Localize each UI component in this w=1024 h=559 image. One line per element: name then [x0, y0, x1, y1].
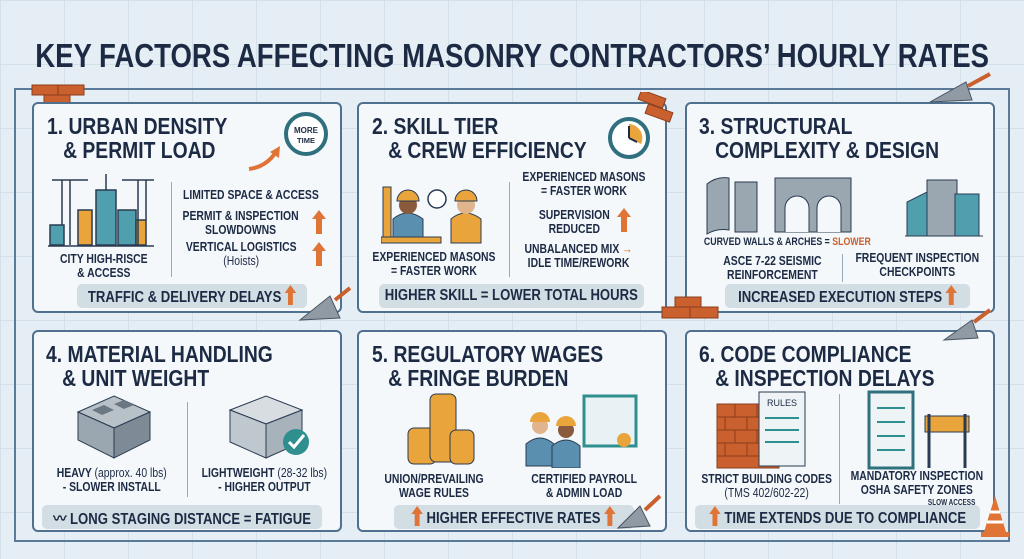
- panel: regulatory wages: & ADMIN LOAD: [546, 485, 622, 500]
- panel: urban density: [32, 102, 342, 313]
- text: EXPERIENCED MASONS: [372, 249, 496, 264]
- icon: heavy block: [76, 396, 152, 459]
- icon: curved walls and arch: [706, 177, 852, 235]
- icon: lightweight block: [228, 396, 309, 459]
- panel: material handling: [32, 330, 342, 532]
- icon: coins: [408, 394, 474, 464]
- callout bar: [379, 284, 644, 308]
- heading: & CREW EFFICIENCY: [388, 137, 587, 163]
- text: city high-rise: [60, 251, 148, 280]
- icon: workers and certificate: [526, 394, 638, 468]
- panel: skill tier: [357, 102, 667, 313]
- icon: traffic cone: [981, 496, 1009, 537]
- callout bar: INCREASED EXECUTION STEPS: [738, 289, 942, 306]
- heading: & UNIT WEIGHT: [62, 365, 209, 391]
- text: city high-rise: & ACCESS: [77, 265, 131, 280]
- icon: city high-rise: [48, 174, 154, 247]
- panel: regulatory wages: [357, 330, 667, 532]
- panel: material handling: - HIGHER OUTPUT: [218, 479, 310, 494]
- text: - SLOWER INSTALL: [62, 479, 161, 494]
- panel: urban density: PERMIT & INSPECTION: [183, 208, 299, 223]
- heading: 2. SKILL TIER: [372, 113, 498, 139]
- text: UNION/PREVAILING: [384, 471, 484, 486]
- heading: 5. REGULATORY WAGES: [372, 341, 603, 367]
- heading: [372, 113, 587, 163]
- heading: COMPLEXITY & DESIGN: [715, 137, 939, 163]
- icon: bricks between: [638, 92, 674, 123]
- panel: code compliance: [685, 330, 995, 532]
- panel: structural complexity: FREQUENT INSPECTION: [855, 250, 979, 265]
- text: [384, 471, 484, 500]
- text list: LIMITED SPACE & ACCESS: [183, 187, 319, 202]
- heading: [372, 341, 603, 391]
- callout bar: [725, 284, 970, 308]
- text: = FASTER WORK: [391, 263, 477, 278]
- panel: skill tier: EXPERIENCED MASONS: [522, 169, 646, 184]
- callout bar: TIME EXTENDS DUE TO COMPLIANCE: [724, 510, 966, 527]
- icon: workers: [381, 186, 482, 244]
- icon: bricks top left: [32, 84, 84, 102]
- panel: code compliance: SLOW ACCESS: [928, 498, 976, 507]
- panel: skill tier: IDLE TIME/REWORK: [528, 255, 630, 270]
- heading: 4. MATERIAL HANDLING: [46, 341, 273, 367]
- icon: clipboard and barrier: [868, 390, 970, 470]
- callout bar: [77, 284, 307, 308]
- callout bar: HIGHER EFFECTIVE RATES: [427, 510, 601, 527]
- icon: building: [905, 180, 983, 236]
- icon: more time clock: [284, 112, 328, 156]
- callout bar: TRAFFIC & DELIVERY DELAYS: [88, 289, 281, 306]
- arrow: [248, 146, 280, 171]
- panel: structural complexity: ASCE 7-22 SEISMIC: [723, 253, 821, 268]
- text: (TMS 402/602-22): [725, 485, 809, 500]
- callout bar: [42, 505, 322, 529]
- text: [702, 471, 832, 500]
- panel: skill tier: = FASTER WORK: [541, 183, 627, 198]
- panel: structural complexity: [685, 102, 995, 313]
- text: [372, 249, 496, 278]
- panel: urban density: SLOWDOWNS: [205, 222, 277, 237]
- callout bar: [695, 505, 980, 529]
- heading: [47, 113, 227, 163]
- panel: structural complexity: CHECKPOINTS: [879, 264, 955, 279]
- heading: & PERMIT LOAD: [63, 137, 216, 163]
- text: city high-rise: CITY HIGH-RISCE: [60, 251, 148, 266]
- panel: skill tier: SUPERVISION: [539, 207, 609, 222]
- panel: regulatory wages: CERTIFIED PAYROLL: [531, 471, 637, 486]
- icon: more time clock: MORE: [294, 126, 319, 135]
- heading: 6. CODE COMPLIANCE: [699, 341, 912, 367]
- callout bar: HIGHER SKILL = LOWER TOTAL HOURS: [385, 287, 638, 304]
- icon: more time clock: TIME: [297, 136, 315, 145]
- panel: skill tier: UNBALANCED MIX →: [525, 241, 633, 256]
- panel: urban density: VERTICAL LOGISTICS: [186, 239, 296, 254]
- panel: code compliance: OSHA SAFETY ZONES: [861, 482, 973, 497]
- panel: code compliance: MANDATORY INSPECTION: [851, 468, 983, 483]
- panel: urban density: (Hoists): [223, 253, 259, 268]
- text: HEAVY (approx. 40 lbs): [56, 465, 167, 480]
- text: [56, 465, 167, 494]
- title: KEY FACTORS AFFECTING MASONRY CONTRACTORS’ HOURLY RATES: [35, 37, 989, 74]
- icon: bricks bottom middle: [662, 296, 718, 318]
- heading: & INSPECTION DELAYS: [715, 365, 934, 391]
- icon: brick wall with rules: RULES: [767, 398, 797, 408]
- heading: [46, 341, 273, 391]
- panel: skill tier: REDUCED: [548, 221, 600, 236]
- panel: structural complexity: REINFORCEMENT: [727, 267, 817, 282]
- text: WAGE RULES: [399, 485, 469, 500]
- heading: 1. URBAN DENSITY: [47, 113, 227, 139]
- icon: clock: [608, 117, 650, 159]
- heading: [699, 341, 934, 391]
- heading: 3. STRUCTURAL: [699, 113, 852, 139]
- panel: material handling: LIGHTWEIGHT (28-32 lbs): [201, 465, 327, 480]
- heading: & FRINGE BURDEN: [388, 365, 568, 391]
- heading: [699, 113, 939, 163]
- text: STRICT BUILDING CODES: [702, 471, 832, 486]
- icon: brick wall with rules: [716, 392, 806, 468]
- text: CURVED WALLS & ARCHES = SLOWER: [704, 236, 870, 248]
- callout bar: [394, 505, 634, 529]
- callout bar: 〰 LONG STAGING DISTANCE = FATIGUE: [53, 511, 311, 528]
